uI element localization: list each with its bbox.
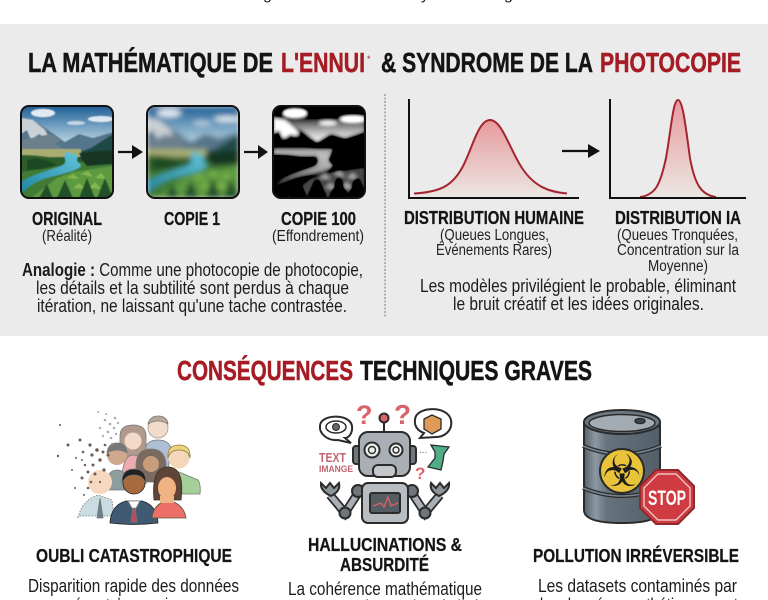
title: *: [367, 54, 371, 64]
heading: hallucinations: [308, 534, 462, 575]
analogy text: itération, ne laissant qu'une tache contrastée.: [37, 296, 347, 316]
label: distribution humaine: DISTRIBUTION HUMAINE: [404, 207, 584, 228]
particles: [57, 424, 110, 496]
stop sign text: STOP: [648, 487, 686, 510]
image: original landscape: [21, 106, 114, 198]
label: distribution IA: [615, 207, 741, 275]
title: L'ENNUI: [281, 47, 365, 78]
arrow: human to AI: [562, 144, 600, 158]
question marks: [356, 399, 427, 483]
description: oubli: Disparition rapide des données: [28, 576, 239, 596]
analogy text: Analogie : Comme une photocopie de photocopie,: [22, 260, 363, 280]
heading: oubli catastrophique: OUBLI CATASTROPHIQUE: [36, 545, 232, 566]
icon: people dissolving: [78, 416, 200, 524]
heading: hallucinations: ABSURDITÉ: [340, 554, 429, 575]
icon labels: text image: TEXT: [319, 450, 346, 465]
icon labels: text image: [319, 450, 353, 475]
label: copie 100: COPIE 100: [281, 208, 356, 229]
label: distribution IA: (Queues Tronquées,: [617, 227, 738, 244]
analogy text: les détails et la subtilité sont perdus à chaque: [36, 278, 349, 298]
label: original: [32, 208, 102, 245]
question marks: ?: [415, 464, 425, 483]
icon: confused robot: [320, 409, 451, 523]
question marks: ?: [394, 399, 411, 430]
label: distribution IA: DISTRIBUTION IA: [615, 207, 741, 228]
top clipped text line: [263, 0, 513, 3]
description: pollution: Les datasets contaminés par: [538, 576, 737, 596]
image: blurred copy: [147, 106, 240, 198]
title: [28, 47, 741, 78]
description: hallucinations: La cohérence mathématique: [288, 579, 482, 599]
label: copie 1: COPIE 1: [164, 208, 220, 229]
label: distribution humaine: Événements Rares): [436, 242, 552, 259]
label: copie 100: [272, 208, 364, 245]
panel: mathématique de l'ennui: [0, 24, 768, 336]
image: high contrast copy: [273, 106, 366, 198]
heading: conséquences: [177, 355, 592, 386]
title: LA MATHÉMATIQUE DE: [28, 47, 273, 78]
icon labels: text image: IMANGE: [319, 464, 353, 475]
label: distribution humaine: (Queues Longues,: [440, 227, 549, 244]
column: pollution: [533, 410, 739, 600]
explanation text: [420, 276, 736, 314]
explanation text: le bruit créatif et les idées originales.: [453, 294, 704, 314]
label: distribution IA: Moyenne): [648, 258, 708, 275]
chart: AI distribution: [610, 99, 746, 198]
question marks: ?: [356, 400, 372, 430]
question marks: ...: [419, 445, 427, 456]
analogy text: [22, 260, 363, 316]
column: hallucinations: [288, 399, 482, 600]
label: copie 100: (Effondrement): [272, 228, 364, 245]
heading: hallucinations: HALLUCINATIONS &: [308, 534, 462, 555]
label: distribution humaine: [404, 207, 584, 259]
icon: biohazard symbol: ☣: [602, 446, 642, 497]
heading: conséquences: TECHNIQUES GRAVES: [360, 355, 592, 386]
label: distribution IA: Concentration sur la: [617, 242, 739, 259]
heading: conséquences: CONSÉQUENCES: [177, 355, 353, 386]
title: & SYNDROME DE LA: [381, 47, 593, 78]
chart: human distribution: [409, 99, 579, 198]
label: original: (Réalité): [42, 228, 92, 245]
label: original: ORIGINAL: [32, 208, 102, 229]
arrow: copie 1 to copie 100: [244, 145, 268, 159]
column: oubli catastrophique: [28, 411, 239, 600]
arrow: original to copie 1: [118, 145, 143, 159]
icon: toxic barrel: [583, 410, 694, 524]
